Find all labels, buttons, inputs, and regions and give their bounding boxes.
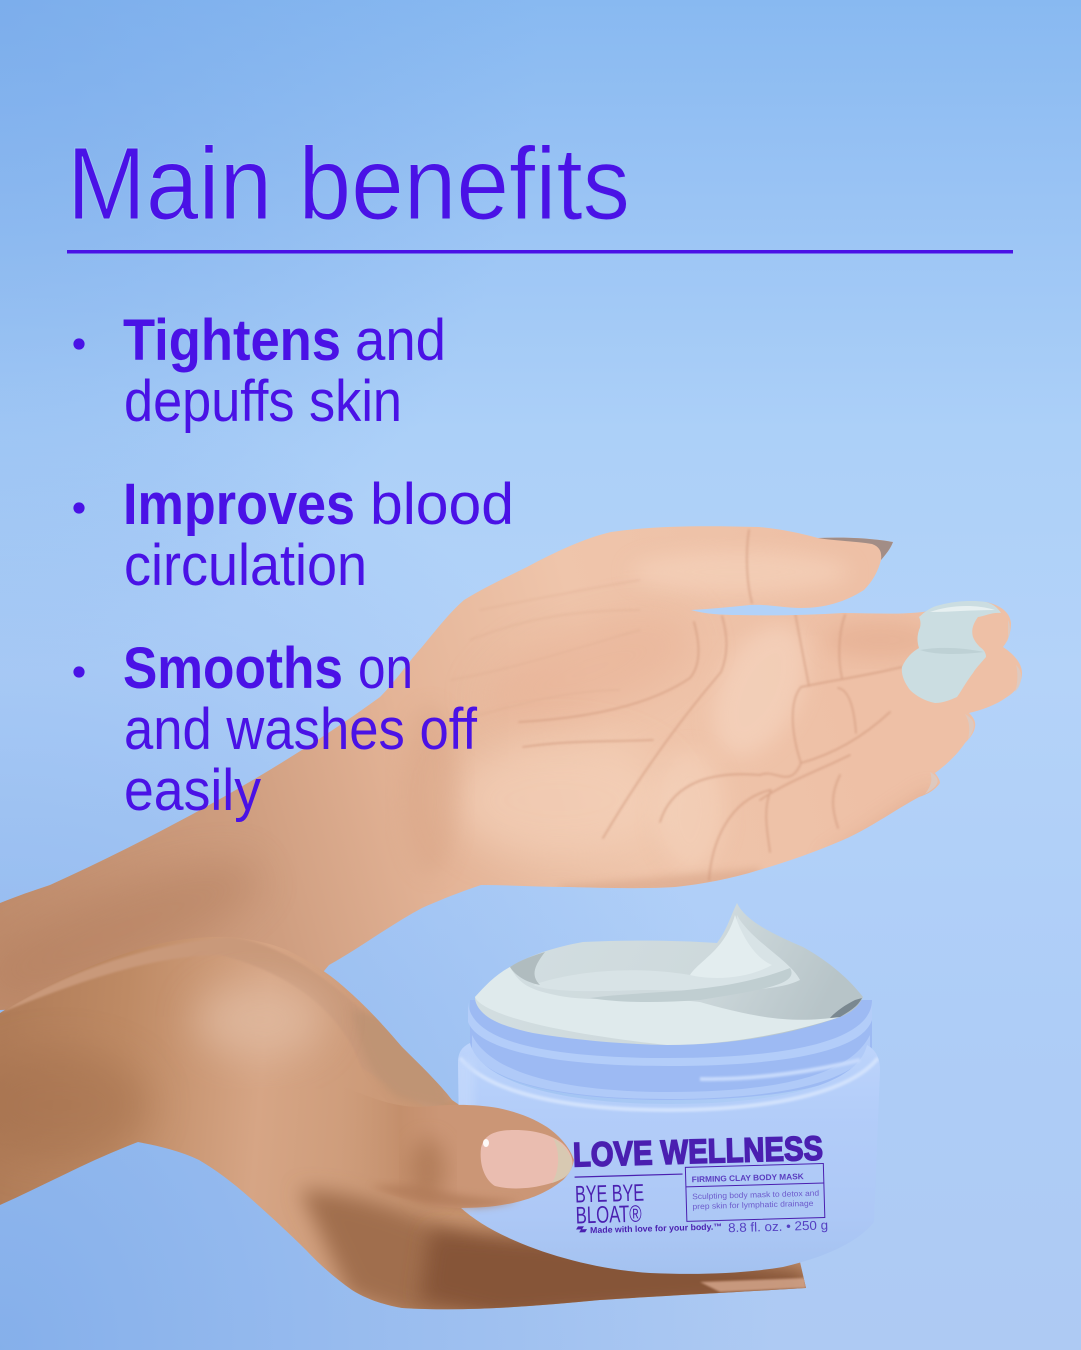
- jar label: prep skin for lymphatic drainage: [692, 1199, 814, 1211]
- jar label: BLOAT®: [575, 1201, 642, 1229]
- benefit: smooths on and washes off easily: easily: [124, 758, 261, 823]
- tagline: Made with love for your body.™: [590, 1221, 722, 1235]
- clay mound: [475, 903, 863, 1045]
- palm and finger creases: [519, 530, 902, 880]
- thumb nail: [818, 538, 893, 560]
- small logo mark: [576, 1226, 587, 1232]
- benefit: smooths on and washes off easily: [73, 636, 478, 823]
- benefit: tightens and depuffs skin: and: [355, 308, 446, 373]
- illustration: upper hand and arm: [0, 526, 1022, 1023]
- product description: Sculpting body mask to detox and: [692, 1189, 819, 1201]
- benefit: improves blood circulation: blood: [370, 472, 514, 537]
- title divider: [67, 250, 1013, 254]
- product line: BYE BYE: [575, 1180, 644, 1208]
- product type: FIRMING CLAY BODY MASK: [692, 1172, 804, 1184]
- title: Main benefits: [67, 126, 630, 241]
- benefits list: [73, 308, 514, 823]
- benefit: smooths on and washes off easily: Smooths: [123, 636, 343, 701]
- jar neck: [470, 1000, 872, 1100]
- thread highlight: [700, 1060, 860, 1079]
- illustration: lower hand palm: [0, 937, 810, 1320]
- label rules and box: [575, 1173, 683, 1178]
- clay on fingertips: [902, 601, 1001, 703]
- fingertip nails: [925, 620, 1021, 794]
- brand name: LOVE WELLNESS: [572, 1130, 823, 1175]
- benefit: tightens and depuffs skin: [73, 308, 446, 434]
- benefit: improves blood circulation: [73, 472, 514, 598]
- benefit: tightens and depuffs skin: Tightens: [123, 308, 341, 373]
- illustration: thumb over jar: [340, 1085, 574, 1208]
- benefit: improves blood circulation: circulation: [124, 533, 367, 598]
- benefit: improves blood circulation: Improves: [123, 472, 355, 537]
- jar label: [572, 1129, 828, 1240]
- thumbnail: [481, 1130, 573, 1188]
- hand shading: [0, 530, 950, 1023]
- benefit: tightens and depuffs skin: depuffs skin: [124, 369, 402, 434]
- jar body: [458, 1043, 880, 1274]
- net weight: 8.8 fl. oz. • 250 g: [728, 1217, 828, 1235]
- illustration: clay mask jar: [452, 903, 880, 1274]
- benefit: smooths on and washes off easily: on: [358, 636, 413, 701]
- benefit: smooths on and washes off easily: and washes off: [124, 697, 478, 762]
